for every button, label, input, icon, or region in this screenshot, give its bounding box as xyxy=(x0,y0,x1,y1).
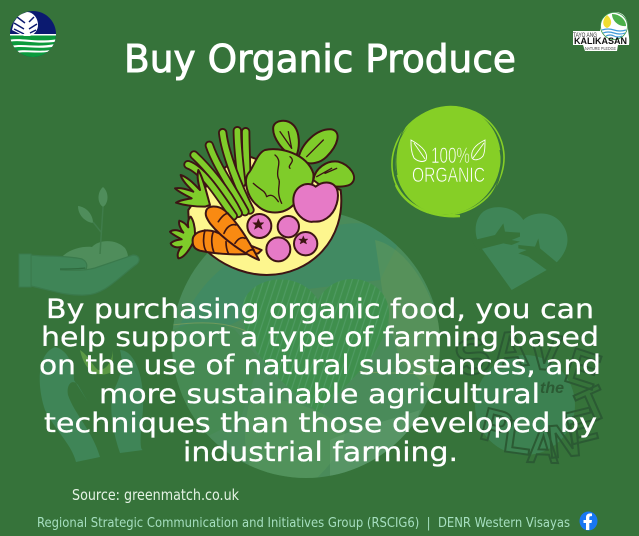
footer credit: Regional Strategic Communication and Initiatives Group (RSCIG6) | DENR Western Visayas xyxy=(37,515,570,531)
seal tree xyxy=(12,12,38,36)
icon: hand holding sapling xyxy=(19,187,139,295)
badge: 100% organic xyxy=(372,86,524,235)
badge leaf right xyxy=(472,140,485,160)
title: Buy Organic Produce xyxy=(124,37,516,81)
carrot greens xyxy=(170,170,210,258)
illustration: vegetable bowl xyxy=(170,121,354,275)
logo: DENR seal xyxy=(10,11,56,57)
carrots xyxy=(193,207,262,260)
badge text organic: ORGANIC xyxy=(412,164,485,187)
body text: industrial farming. xyxy=(183,437,458,468)
body text: techniques than those developed by xyxy=(44,408,597,439)
blueberries xyxy=(247,214,317,261)
background globe xyxy=(172,210,440,480)
logo: Tayo ang Kalikasan xyxy=(573,12,629,51)
icon: heart with hands xyxy=(472,207,567,290)
body text xyxy=(39,294,601,468)
badge text 100%: 100% xyxy=(431,143,470,168)
lettering: the: the xyxy=(540,380,564,397)
logo: Tayo ang Kalikasan: KALIKASAN xyxy=(574,36,627,47)
scribbled heart on globe xyxy=(242,279,389,412)
icon: caring hands xyxy=(40,347,143,462)
body text: on the use of natural substances, and xyxy=(39,350,601,381)
save the planet lettering xyxy=(448,320,616,473)
logo leaves and waves xyxy=(600,12,628,40)
sapling upper leaf xyxy=(98,187,108,207)
bok choy leaves xyxy=(273,121,354,187)
sapling lower leaf xyxy=(78,206,93,223)
body text: more sustainable agricultural xyxy=(99,379,540,410)
logo: Tayo ang Kalikasan: NATURE PLEDGE xyxy=(585,46,616,51)
body text: By purchasing organic food, you can xyxy=(46,294,594,325)
lettering: planet: PLANET xyxy=(476,375,616,473)
lettuce xyxy=(246,149,313,212)
badge leaf left xyxy=(411,140,427,161)
asparagus xyxy=(188,131,250,216)
body text: help support a type of farming based xyxy=(41,322,599,353)
icon: facebook xyxy=(580,512,598,530)
source line: Source: greenmatch.co.uk xyxy=(72,486,239,504)
bowl xyxy=(188,157,341,275)
apple xyxy=(293,182,338,222)
lettering: save: SAVE xyxy=(448,320,608,401)
logo: Tayo ang Kalikasan: TAYO ANG xyxy=(573,32,597,39)
